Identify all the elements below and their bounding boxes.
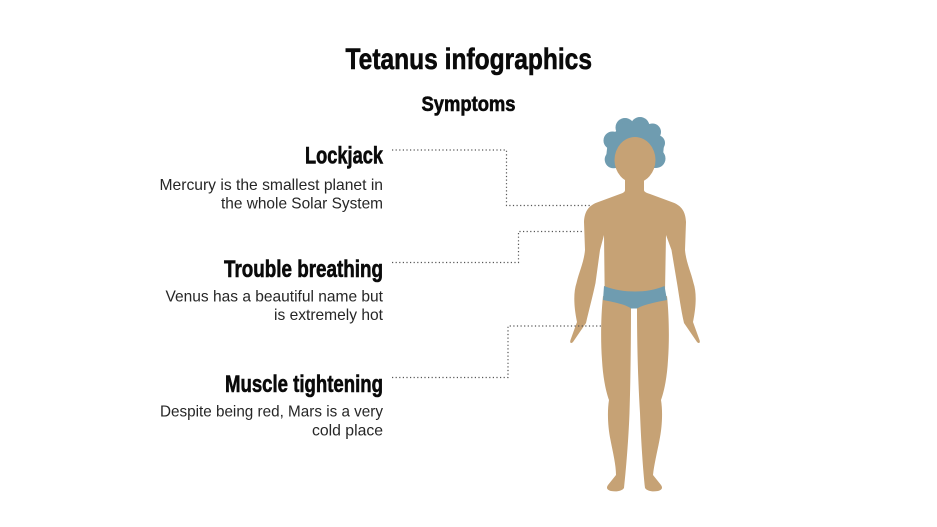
text block: muscle tightening [160,371,383,440]
connector: lockjack [392,150,591,206]
text block: lockjack [160,142,383,212]
text block: trouble breathing: Venus has a beautiful name but [166,288,384,306]
text block: muscle tightening: cold place [312,422,383,440]
human figure [570,117,700,491]
text block: trouble breathing: is extremely hot [274,307,384,324]
right leg [637,296,669,491]
text block: muscle tightening: Despite being red, Mars is a very [160,404,383,420]
text block: lockjack: the whole Solar System [221,196,383,212]
text block: trouble breathing [166,256,384,324]
text block: trouble breathing: Trouble breathing [224,256,383,283]
text block: lockjack: Mercury is the smallest planet in [160,177,383,194]
clothing: briefs [603,286,667,308]
torso and arms [570,176,700,343]
text block: muscle tightening: Muscle tightening [225,371,383,398]
left leg [601,296,631,491]
head [614,137,656,183]
connector: muscle tightening [392,326,601,378]
subtitle: Symptoms [422,93,516,116]
text block: lockjack: Lockjack [305,142,383,170]
title: Tetanus infographics [346,43,592,76]
icon: hair [604,117,666,168]
connector: trouble breathing [392,232,584,262]
